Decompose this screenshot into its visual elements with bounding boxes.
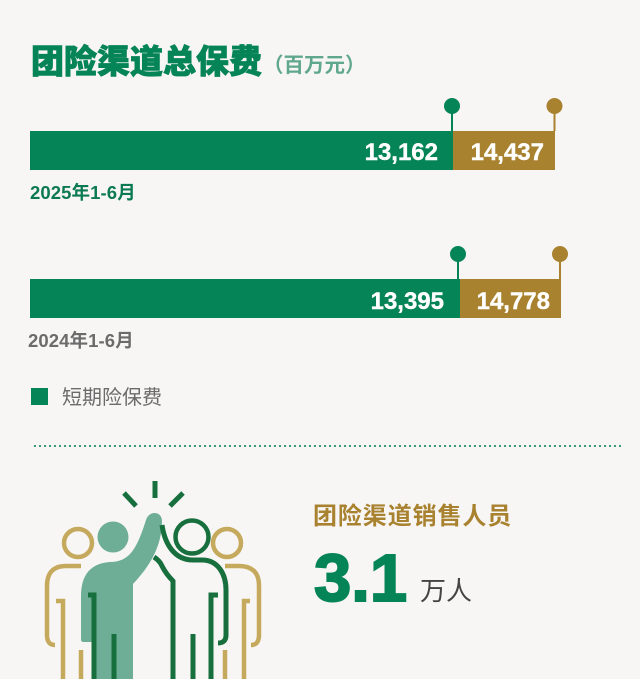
pin: gold 2024 [552,246,568,279]
value: 13,162: 13,162 [365,139,438,166]
label: 2025: 2025年1-6月 [30,182,136,203]
heading: sales staff: 团险渠道销售人员 [313,503,512,530]
bar chart: 2024 [28,246,568,351]
dark green lines [88,481,226,679]
value: 13,395: 13,395 [371,288,444,315]
title [31,43,366,80]
value: 14,437: 14,437 [471,139,544,166]
pin: green 2025 [444,98,460,131]
value: 14,778: 14,778 [477,288,550,315]
title: （百万元） [263,54,366,77]
gold bar 2025 [453,131,555,170]
gold person right [213,529,259,679]
pin: gold 2025 [547,98,562,131]
icon: people high five [47,481,259,679]
filled person [81,513,162,679]
bar chart: 2025 [30,98,562,203]
pin: green 2024 [450,246,466,279]
legend: 短期险保费 [62,386,162,409]
gold person left [47,529,92,679]
stat: 3.1: 3.1 [314,541,407,616]
title: 团险渠道总保费 [31,43,262,80]
green bar 2024 [30,279,460,318]
green bar 2025 [30,131,453,170]
gold bar 2024 [460,279,561,318]
label: 2024: 2024年1-6月 [28,330,134,351]
stat unit: 万人 [420,576,472,606]
